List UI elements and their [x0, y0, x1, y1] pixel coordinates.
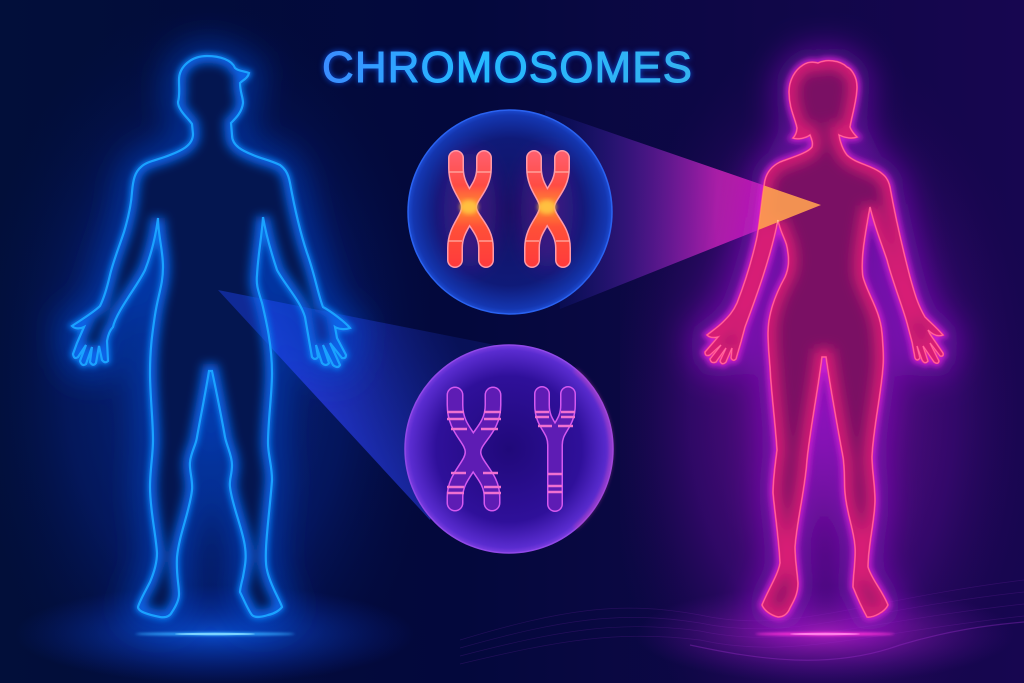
beam: XY chromosomes to male body — [218, 290, 495, 520]
wave mesh at bottom right — [460, 580, 1024, 664]
beam: XX chromosomes to female body — [545, 110, 821, 309]
circle: XY chromosomes — [405, 345, 613, 553]
chromosome X, first — [444, 152, 496, 274]
floor light under male — [135, 632, 295, 636]
beam highlight over female shoulder — [758, 186, 821, 230]
female body silhouette — [705, 61, 943, 617]
chromosome Y — [535, 394, 575, 504]
title: CHROMOSOMES — [322, 43, 692, 92]
floor light under female — [755, 632, 895, 636]
circle: XX chromosomes — [408, 110, 612, 314]
male body silhouette — [42, 25, 379, 638]
chromosome X — [447, 395, 501, 503]
chromosome X, second — [521, 152, 573, 274]
